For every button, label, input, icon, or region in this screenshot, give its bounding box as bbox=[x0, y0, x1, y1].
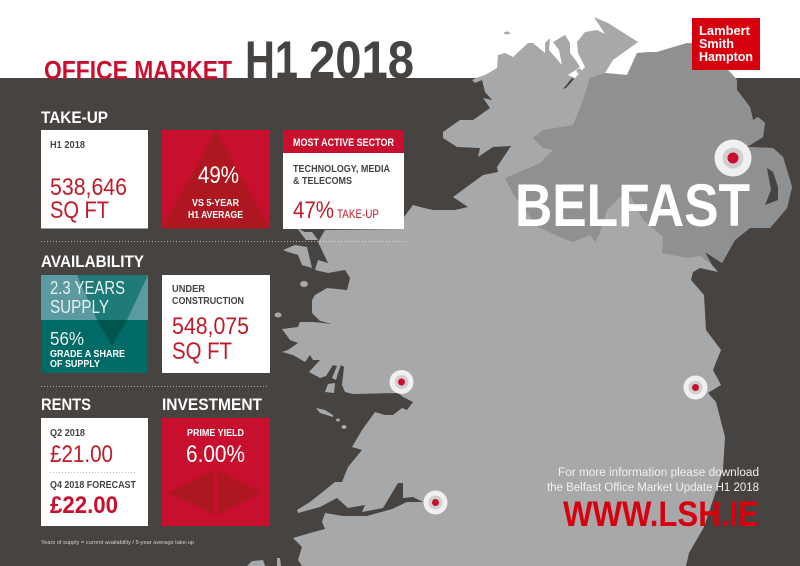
text: more information: the Belfast Office Market Update H1 2018 bbox=[547, 482, 759, 494]
panel: under construction: 548,075 bbox=[172, 313, 249, 340]
label: Belfast: BELFAST bbox=[515, 172, 750, 239]
panel: under construction: SQ FT bbox=[172, 338, 232, 365]
panel: years of supply and grade A share bbox=[41, 275, 148, 373]
panel: most active sector: MOST ACTIVE SECTOR bbox=[293, 137, 394, 149]
panel: rents: Q2 2018 bbox=[50, 428, 85, 439]
panel: most active sector: & TELECOMS bbox=[293, 175, 352, 187]
map land: bottom fragments bbox=[247, 560, 265, 566]
panel: H1 2018 take-up bbox=[41, 130, 148, 228]
logo: Lambert Smith Hampton bbox=[692, 18, 760, 70]
pin: Belfast bbox=[714, 140, 752, 176]
map land: small island 5 bbox=[342, 425, 346, 429]
icon: left arrow bbox=[168, 470, 214, 515]
map land: Republic of Ireland bbox=[282, 17, 792, 566]
panel: investment prime yield: 6.00% bbox=[186, 441, 245, 468]
map land: islet in Lough Swilly bbox=[576, 68, 582, 74]
heading: rents: RENTS bbox=[41, 395, 91, 414]
map land: small island 6 bbox=[504, 32, 510, 34]
panel: years of supply and grade A share: 56% bbox=[50, 329, 84, 349]
panel: years of supply and grade A share: SUPPLY bbox=[50, 297, 109, 317]
panel: most active sector: TECHNOLOGY, MEDIA bbox=[293, 163, 390, 175]
panel: 49% vs 5-year average: VS 5-YEAR bbox=[192, 198, 240, 209]
panel: 49% vs 5-year average: H1 AVERAGE bbox=[188, 210, 243, 221]
panel: rents: Q4 2018 FORECAST bbox=[50, 480, 136, 491]
panel: rents bbox=[41, 418, 148, 526]
pin: Limerick bbox=[424, 490, 448, 514]
text: more information: For more information please download bbox=[558, 467, 759, 479]
panel: investment prime yield bbox=[162, 418, 270, 526]
map land: west coast peninsula bbox=[283, 245, 312, 268]
text: more information bbox=[547, 467, 759, 494]
logo: Lambert Smith Hampton: Hampton bbox=[699, 50, 753, 64]
heading: take-up: TAKE-UP bbox=[41, 108, 108, 127]
panel: years of supply and grade A share: GRADE A SHARE bbox=[50, 348, 125, 360]
map land: small peninsula near Sligo bbox=[297, 228, 318, 240]
panel: years of supply and grade A share: OF SUPPLY bbox=[50, 358, 100, 370]
panel: H1 2018 take-up: SQ FT bbox=[50, 197, 109, 224]
panel: under construction bbox=[162, 275, 270, 373]
panel: 49% vs 5-year average bbox=[162, 130, 270, 228]
map land: small island bbox=[300, 281, 308, 287]
panel: investment prime yield: PRIME YIELD bbox=[187, 428, 244, 439]
panel: rents: £22.00 bbox=[50, 492, 118, 519]
map land: Lough Swilly sliver bbox=[563, 78, 574, 89]
panel: most active sector: 47% bbox=[293, 197, 334, 224]
panel: 49% vs 5-year average: 49% bbox=[198, 162, 239, 189]
panel: years of supply and grade A share: 2.3 YEARS bbox=[50, 278, 125, 298]
map land: Aran islands bbox=[316, 408, 333, 417]
panel: under construction: UNDER bbox=[172, 283, 205, 295]
title: 2018: 2018 bbox=[309, 31, 414, 90]
map land: Strangford Lough bbox=[765, 168, 778, 205]
pin: Galway bbox=[390, 370, 414, 394]
logo: Lambert Smith Hampton: Lambert bbox=[699, 24, 751, 38]
panel: rents: £21.00 bbox=[50, 441, 113, 468]
icon: right arrow bbox=[217, 470, 262, 515]
map: island of Ireland bbox=[247, 17, 792, 566]
map land: Northern Ireland bbox=[505, 43, 792, 265]
panel: H1 2018 take-up: H1 2018 bbox=[50, 140, 85, 151]
map land: small island 2 bbox=[274, 312, 282, 318]
panel: most active sector bbox=[283, 130, 404, 229]
map land: islet in Connemara bbox=[325, 383, 335, 393]
panel: under construction: CONSTRUCTION bbox=[172, 295, 244, 307]
title: office market: OFFICE MARKET bbox=[44, 55, 232, 85]
panel: most active sector: TAKE-UP bbox=[337, 209, 379, 221]
heading: investment: INVESTMENT bbox=[162, 395, 263, 414]
map land: bottom fragment 2 bbox=[277, 558, 281, 566]
panel: H1 2018 take-up: 538,646 bbox=[50, 174, 127, 201]
map land: small island 4 bbox=[336, 418, 340, 422]
logo: Lambert Smith Hampton: Smith bbox=[699, 37, 734, 51]
link: website: WWW.LSH.IE bbox=[563, 495, 759, 534]
pin: Dublin bbox=[684, 376, 708, 400]
title: H1: H1 bbox=[245, 31, 298, 90]
footnote: Years of supply = current availability / 5-year average take-up bbox=[41, 540, 194, 546]
heading: availability: AVAILABILITY bbox=[41, 252, 145, 271]
